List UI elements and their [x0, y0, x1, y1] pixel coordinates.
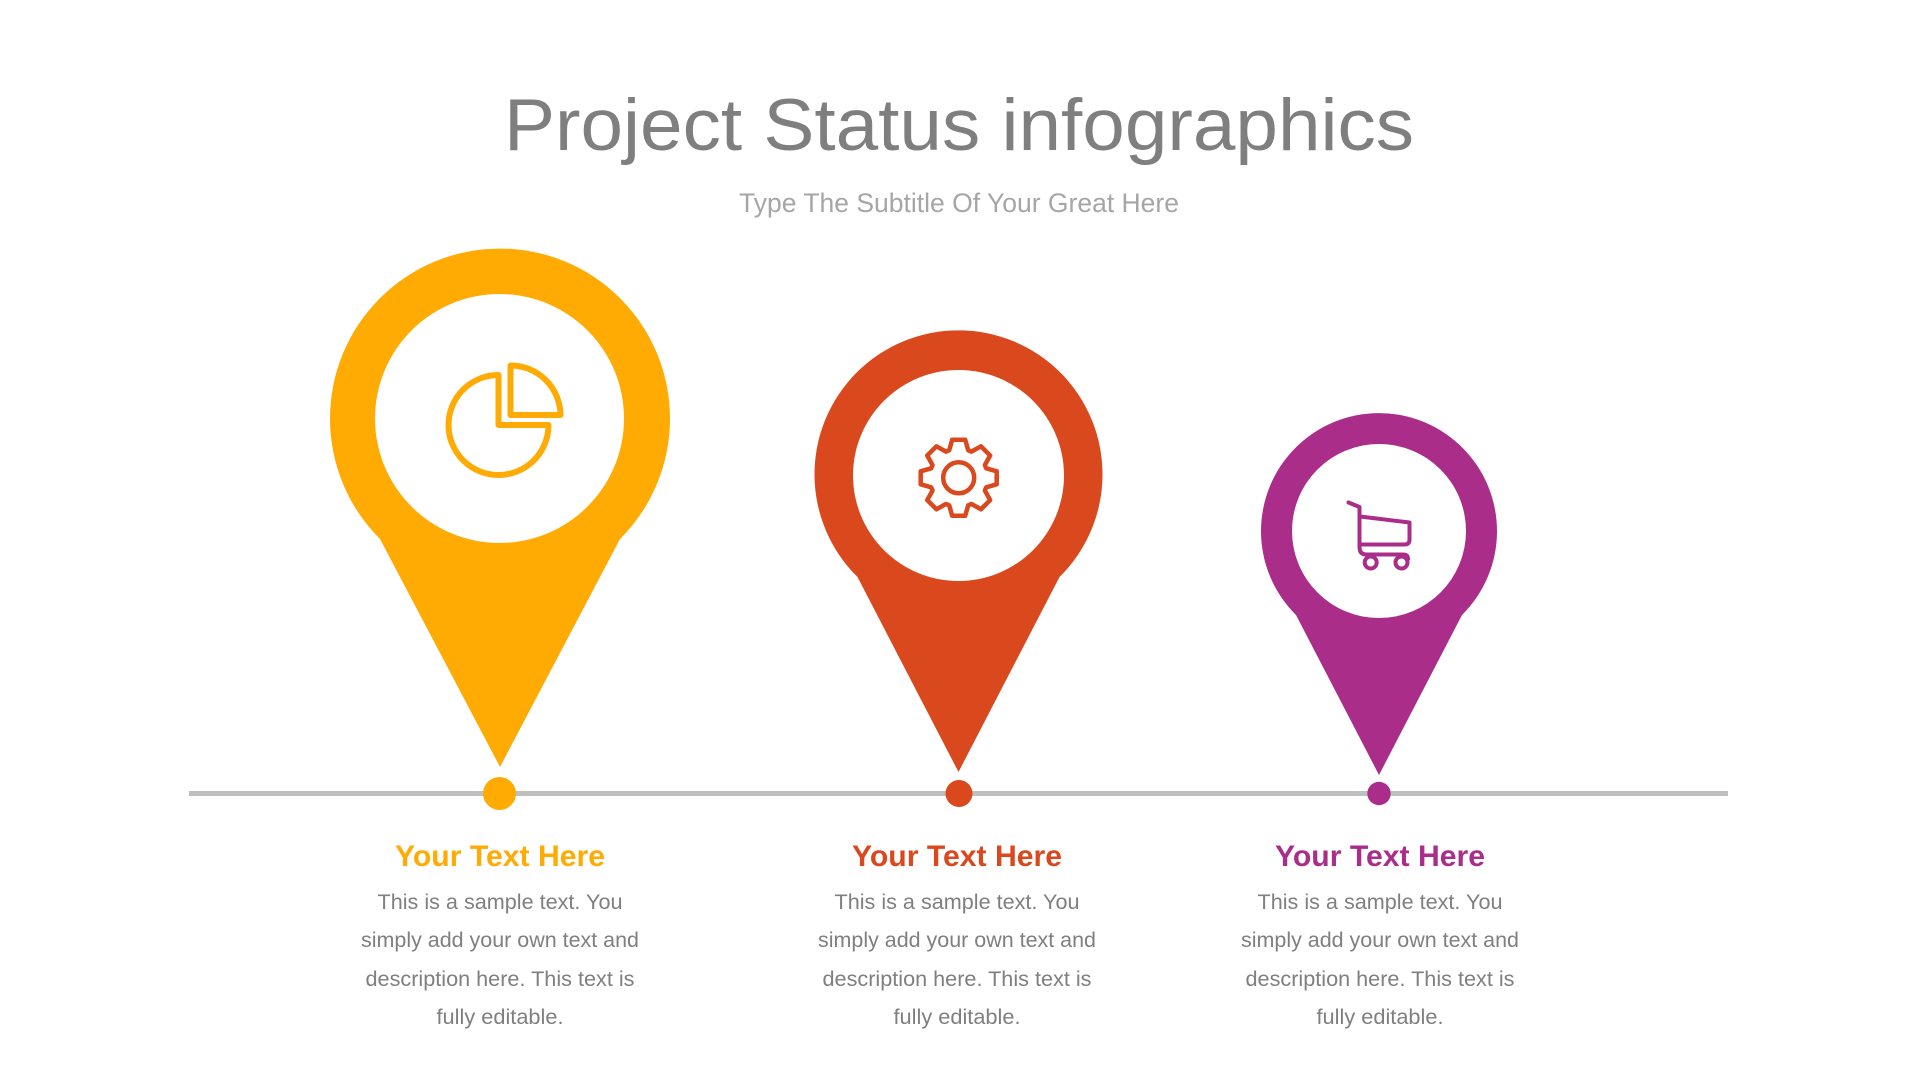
- timeline dot: orange: [483, 777, 516, 810]
- pin body: red: [814, 330, 1102, 772]
- description: red: simply add your own text and: [818, 929, 1096, 952]
- panel: orange pin: [330, 249, 670, 767]
- description: orange: description here. This text is: [366, 968, 634, 991]
- panel: purple text: [1241, 840, 1519, 1029]
- subtitle: Type The Subtitle Of Your Great Here: [739, 188, 1179, 218]
- panel: red pin: [814, 330, 1102, 772]
- description: orange: This is a sample text. You: [378, 891, 622, 914]
- description: purple: simply add your own text and: [1241, 929, 1519, 952]
- description: red: This is a sample text. You: [834, 891, 1080, 914]
- description: red: [818, 891, 1096, 1029]
- pin inner circle: purple: [1292, 444, 1466, 618]
- description: orange: simply add your own text and: [361, 929, 639, 952]
- description: red: fully editable.: [894, 1006, 1020, 1029]
- heading: purple: Your Text Here: [1275, 840, 1485, 873]
- icon: gear: [921, 440, 997, 516]
- description: purple: fully editable.: [1316, 1006, 1444, 1029]
- timeline dot: purple: [1367, 782, 1391, 805]
- panel: orange text: [361, 840, 639, 1029]
- pin inner circle: red: [853, 370, 1064, 581]
- description: purple: This is a sample text. You: [1258, 891, 1502, 914]
- timeline line: [189, 791, 1728, 796]
- pin body: purple: [1261, 413, 1497, 775]
- heading: orange: Your Text Here: [395, 840, 605, 873]
- description: red: description here. This text is: [822, 968, 1092, 991]
- panel: red text: [818, 840, 1096, 1029]
- description: purple: [1241, 891, 1519, 1029]
- icon: pie chart: [448, 366, 560, 475]
- description: orange: fully editable.: [436, 1006, 564, 1029]
- icon: shopping cart: [1348, 502, 1410, 568]
- panel: purple pin: [1261, 413, 1497, 775]
- description: orange: [361, 891, 639, 1029]
- heading: red: Your Text Here: [852, 840, 1062, 873]
- description: purple: description here. This text is: [1246, 968, 1514, 991]
- timeline dot: red: [946, 780, 972, 807]
- pin inner circle: orange: [375, 294, 624, 543]
- title: Project Status infographics: [504, 85, 1414, 166]
- pin body: orange: [330, 249, 670, 767]
